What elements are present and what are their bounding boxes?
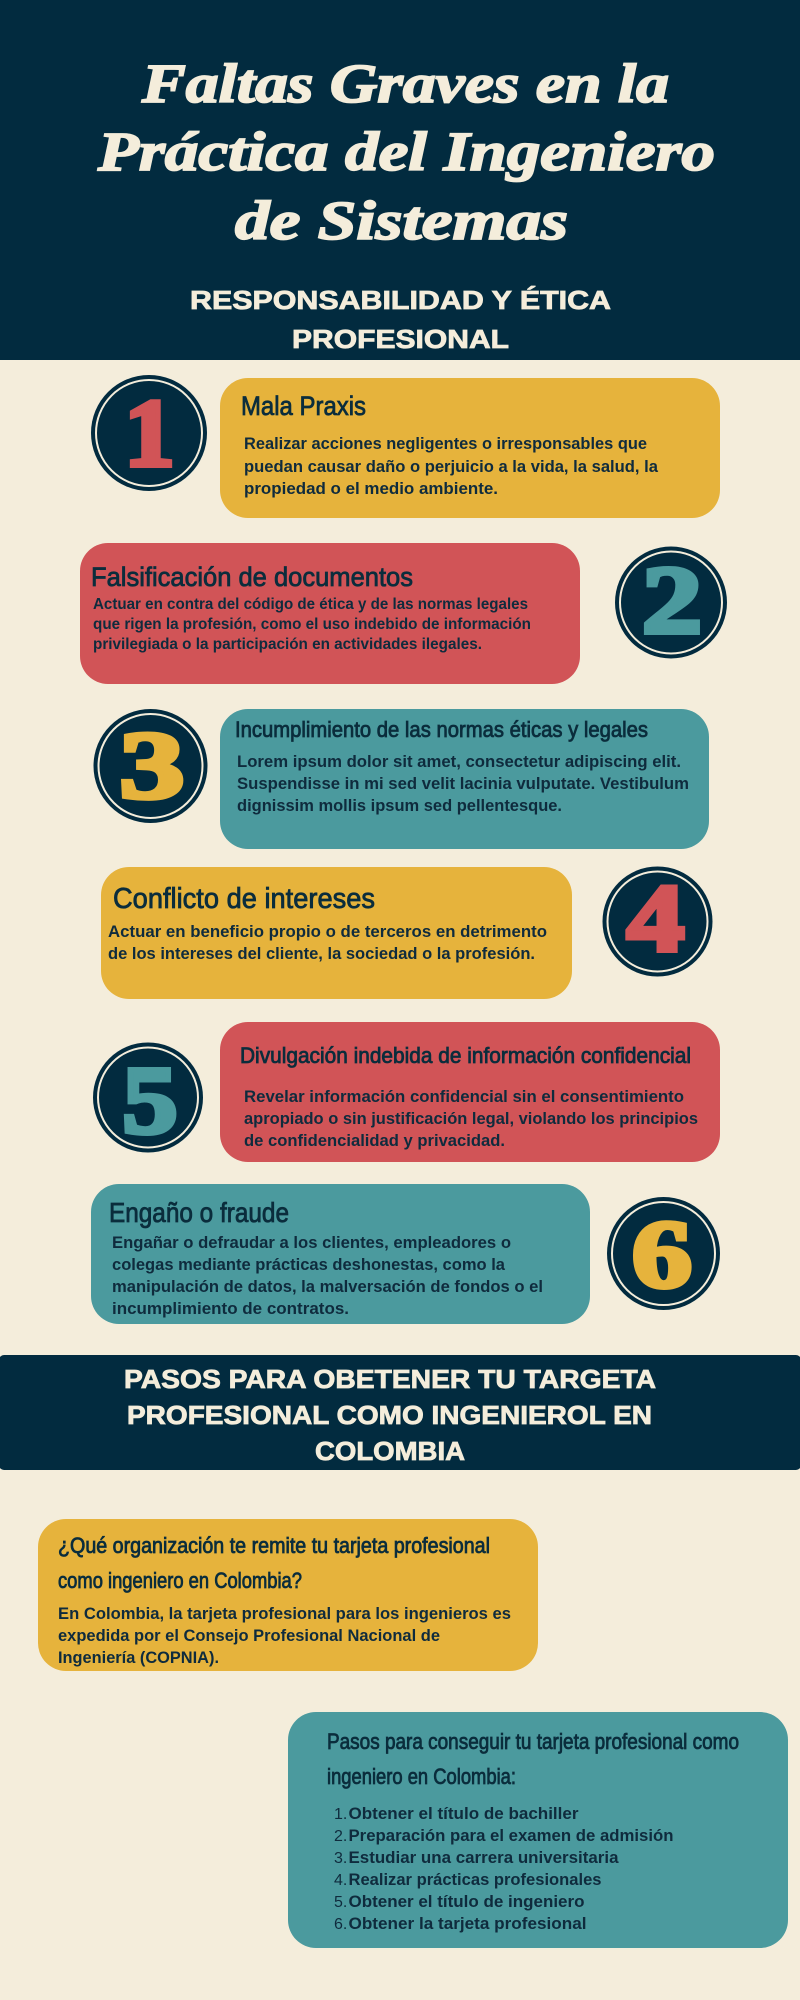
- panel: Falsificación de documentos: [80, 543, 580, 684]
- panel: Engaño o fraude: [91, 1184, 590, 1324]
- numbered list: [334, 1805, 674, 1933]
- body text: [244, 1088, 698, 1150]
- body text: [108, 923, 547, 963]
- badge: number 1: 1: [124, 381, 175, 487]
- body text: [58, 1605, 511, 1667]
- heading: Mala Praxis: Mala Praxis: [241, 391, 366, 421]
- subtitle: [190, 285, 611, 354]
- body text: expedida por el Consejo Profesional Nacional de: [58, 1627, 440, 1645]
- title: [97, 53, 715, 251]
- heading: Conflicto de intereses: Conflicto de intereses: [113, 883, 375, 915]
- numbered list: Obtener el título de bachiller: [348, 1805, 579, 1823]
- badge: number 6: [607, 1197, 720, 1310]
- numbered list: Obtener el título de ingeniero: [348, 1893, 584, 1911]
- badge: number 6: 6: [632, 1201, 692, 1308]
- numbered list: Obtener la tarjeta profesional: [348, 1915, 586, 1933]
- numbered list: 1.: [334, 1806, 347, 1823]
- title: Faltas Graves en la: [141, 53, 669, 114]
- badge: number 5: 5: [122, 1048, 178, 1154]
- body text: Lorem ipsum dolor sit amet, consectetur adipiscing elit.: [237, 753, 681, 771]
- body text: manipulación de datos, la malversación de fondos o el: [112, 1278, 543, 1296]
- panel: organización: [38, 1519, 538, 1671]
- body text: que rigen la profesión, como el uso indebido de información: [93, 616, 531, 633]
- body text: privilegiada o la participación en actividades ilegales.: [93, 636, 482, 653]
- heading: pasos: Pasos para conseguir tu tarjeta profesional como: [327, 1729, 739, 1754]
- header banner: [0, 0, 800, 360]
- title: de Sistemas: [235, 190, 568, 251]
- body text: Actuar en contra del código de ética y de las normas legales: [93, 596, 528, 613]
- heading: Incumplimiento: Incumplimiento de las normas éticas y legales: [235, 717, 648, 742]
- heading: organización: ¿Qué organización te remite tu tarjeta profesional: [58, 1533, 490, 1558]
- body text: de los intereses del cliente, la sociedad o la profesión.: [108, 945, 535, 963]
- panel: pasos: [288, 1712, 788, 1948]
- body text: Revelar información confidencial sin el consentimiento: [244, 1088, 684, 1106]
- banner heading: PASOS PARA OBETENER TU TARGETA: [124, 1364, 656, 1394]
- badge: number 4: [602, 865, 712, 976]
- numbered list: 4.: [334, 1872, 347, 1889]
- section banner: pasos: [0, 1355, 800, 1470]
- heading: Falsificación de documentos: Falsificación de documentos: [91, 562, 413, 592]
- numbered list: Realizar prácticas profesionales: [348, 1871, 602, 1889]
- banner heading: COLOMBIA: [315, 1436, 465, 1466]
- body text: colegas mediante prácticas deshonestas, como la: [112, 1256, 506, 1274]
- body text: [237, 753, 689, 815]
- badge: number 2: [615, 546, 727, 658]
- body text: dignissim mollis ipsum sed pellentesque.: [237, 797, 562, 815]
- panel: Divulgación indebida: [220, 1022, 720, 1162]
- badge: number 4: 4: [627, 865, 684, 971]
- heading: pasos: ingeniero en Colombia:: [327, 1764, 516, 1789]
- numbered list: Estudiar una carrera universitaria: [348, 1849, 619, 1867]
- title: Práctica del Ingeniero: [97, 121, 715, 182]
- body text: [112, 1234, 543, 1318]
- body text: Realizar acciones negligentes o irresponsables que: [244, 435, 647, 453]
- numbered list: 5.: [334, 1894, 347, 1911]
- panel: Incumplimiento de las normas: [220, 709, 709, 849]
- body text: Ingeniería (COPNIA).: [58, 1649, 219, 1667]
- numbered list: 3.: [334, 1850, 347, 1867]
- body text: incumplimiento de contratos.: [112, 1300, 349, 1318]
- badge: number 3: [94, 709, 208, 823]
- numbered list: Preparación para el examen de admisión: [348, 1827, 674, 1845]
- panel: Conflicto de intereses: [101, 867, 572, 999]
- heading: Engaño o fraude: Engaño o fraude: [109, 1197, 289, 1228]
- body text: propiedad o el medio ambiente.: [244, 480, 498, 498]
- body text: Actuar en beneficio propio o de terceros en detrimento: [108, 923, 547, 941]
- numbered list: 2.: [334, 1828, 347, 1845]
- panel: Mala Praxis: [220, 378, 720, 518]
- badge: number 1: [91, 375, 207, 491]
- body text: puedan causar daño o perjuicio a la vida, la salud, la: [244, 458, 659, 476]
- body text: apropiado o sin justificación legal, violando los principios: [244, 1110, 698, 1128]
- badge: number 5: [93, 1042, 203, 1154]
- subtitle: PROFESIONAL: [292, 324, 509, 354]
- heading: organización: como ingeniero en Colombia?: [58, 1568, 302, 1593]
- body text: [93, 596, 531, 653]
- banner heading: PROFESIONAL COMO INGENIEROL EN: [127, 1400, 652, 1430]
- body text: Suspendisse in mi sed velit lacinia vulputate. Vestibulum: [237, 775, 689, 793]
- heading: pasos: [327, 1729, 739, 1789]
- heading: Divulgación indebida: Divulgación indebida de información confidencial: [240, 1043, 691, 1068]
- body text: En Colombia, la tarjeta profesional para los ingenieros es: [58, 1605, 511, 1623]
- numbered list: 6.: [334, 1916, 347, 1933]
- badge: number 2: 2: [642, 547, 702, 654]
- badge: number 3: 3: [120, 712, 184, 819]
- body text: de confidencialidad y privacidad.: [244, 1132, 505, 1150]
- banner heading: [124, 1364, 656, 1466]
- body text: [244, 435, 659, 498]
- body text: Engañar o defraudar a los clientes, empleadores o: [112, 1234, 511, 1252]
- heading: organización: [58, 1533, 490, 1593]
- subtitle: RESPONSABILIDAD Y ÉTICA: [190, 285, 611, 315]
